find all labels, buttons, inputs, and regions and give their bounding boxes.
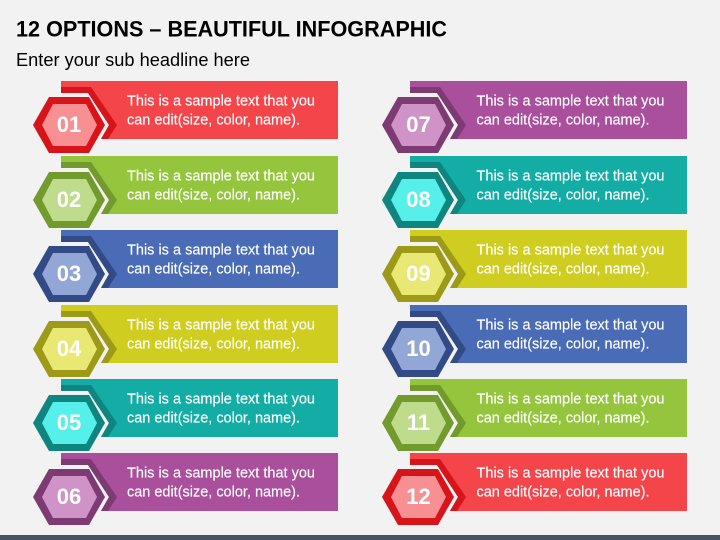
text (476, 390, 664, 426)
banner (410, 81, 687, 139)
text: This is a sample text that you (476, 242, 664, 258)
hexagon badge (382, 246, 454, 302)
chevron (61, 162, 117, 214)
hexagon badge (33, 469, 105, 525)
text (476, 316, 664, 352)
text: This is a sample text that you (127, 316, 315, 334)
number: 01 (57, 112, 81, 137)
text: can edit(size, color, name). (127, 260, 300, 278)
text: can edit(size, color, name). (127, 410, 300, 426)
banner (410, 305, 687, 363)
banner (61, 379, 338, 437)
hexagon badge (33, 172, 105, 228)
number: 11 (407, 410, 430, 435)
text: can edit(size, color, name). (476, 260, 650, 278)
text: can edit(size, color, name). (127, 112, 300, 128)
number: 02 (57, 187, 81, 212)
chevron (410, 459, 466, 511)
option 04 (33, 305, 338, 377)
option 08 (382, 156, 687, 228)
option 09 (382, 230, 687, 302)
option 10 (382, 305, 687, 377)
hexagon badge (382, 321, 454, 377)
option 11 (382, 379, 687, 451)
number: 06 (57, 484, 81, 509)
text: can edit(size, color, name). (476, 112, 650, 128)
number: 10 (406, 336, 431, 361)
text: This is a sample text that you (127, 168, 315, 184)
chevron (410, 87, 466, 139)
text: can edit(size, color, name). (127, 336, 300, 352)
chevron (410, 385, 466, 437)
text: This is a sample text that you (476, 316, 664, 334)
text (476, 168, 664, 204)
hexagon badge (33, 321, 105, 377)
text (127, 464, 315, 500)
text: can edit(size, color, name). (476, 186, 650, 204)
text (127, 168, 315, 204)
banner (410, 453, 687, 511)
text (127, 242, 315, 278)
number: 09 (406, 261, 431, 286)
option 07 (382, 81, 687, 153)
option 02 (33, 156, 338, 228)
text: This is a sample text that you (476, 168, 664, 184)
text: can edit(size, color, name). (476, 410, 650, 426)
text: This is a sample text that you (127, 390, 315, 408)
banner (61, 305, 338, 363)
text: can edit(size, color, name). (476, 336, 650, 352)
number: 07 (406, 112, 431, 137)
banner (410, 379, 687, 437)
hexagon badge (33, 97, 105, 153)
option 03 (33, 230, 338, 302)
text (127, 316, 315, 352)
banner (61, 81, 338, 139)
option 01 (33, 81, 338, 153)
text (476, 464, 664, 500)
text (127, 390, 315, 426)
chevron (410, 236, 466, 288)
chevron (410, 311, 466, 363)
text: This is a sample text that you (127, 92, 315, 110)
chevron (61, 311, 117, 363)
chevron (61, 87, 117, 139)
title: 12 OPTIONS – BEAUTIFUL INFOGRAPHIC (16, 16, 447, 42)
text (127, 92, 315, 128)
option 06 (33, 453, 338, 525)
number: 03 (57, 261, 81, 286)
number: 12 (406, 484, 431, 509)
text: This is a sample text that you (127, 464, 315, 482)
chevron (61, 236, 117, 288)
chevron (61, 459, 117, 511)
hexagon badge (382, 395, 454, 451)
text: This is a sample text that you (127, 242, 315, 258)
text (476, 242, 664, 278)
banner (410, 230, 687, 288)
text: This is a sample text that you (476, 390, 664, 408)
option 12 (382, 453, 687, 525)
hexagon badge (382, 97, 454, 153)
banner (410, 156, 687, 214)
hexagon badge (33, 246, 105, 302)
number: 04 (57, 336, 82, 361)
hexagon badge (33, 395, 105, 451)
text: can edit(size, color, name). (127, 484, 300, 500)
chevron (410, 162, 466, 214)
number: 08 (406, 187, 431, 212)
hexagon badge (382, 172, 454, 228)
text (476, 92, 664, 128)
chevron (61, 385, 117, 437)
subtitle: Enter your sub headline here (16, 50, 250, 70)
banner (61, 453, 338, 511)
number: 05 (57, 410, 81, 435)
text: can edit(size, color, name). (476, 484, 650, 500)
banner (61, 156, 338, 214)
text: can edit(size, color, name). (127, 186, 300, 204)
hexagon badge (382, 469, 454, 525)
text: This is a sample text that you (476, 464, 664, 482)
footer bar (0, 535, 720, 540)
text: This is a sample text that you (476, 92, 664, 110)
banner (61, 230, 338, 288)
option 05 (33, 379, 338, 451)
